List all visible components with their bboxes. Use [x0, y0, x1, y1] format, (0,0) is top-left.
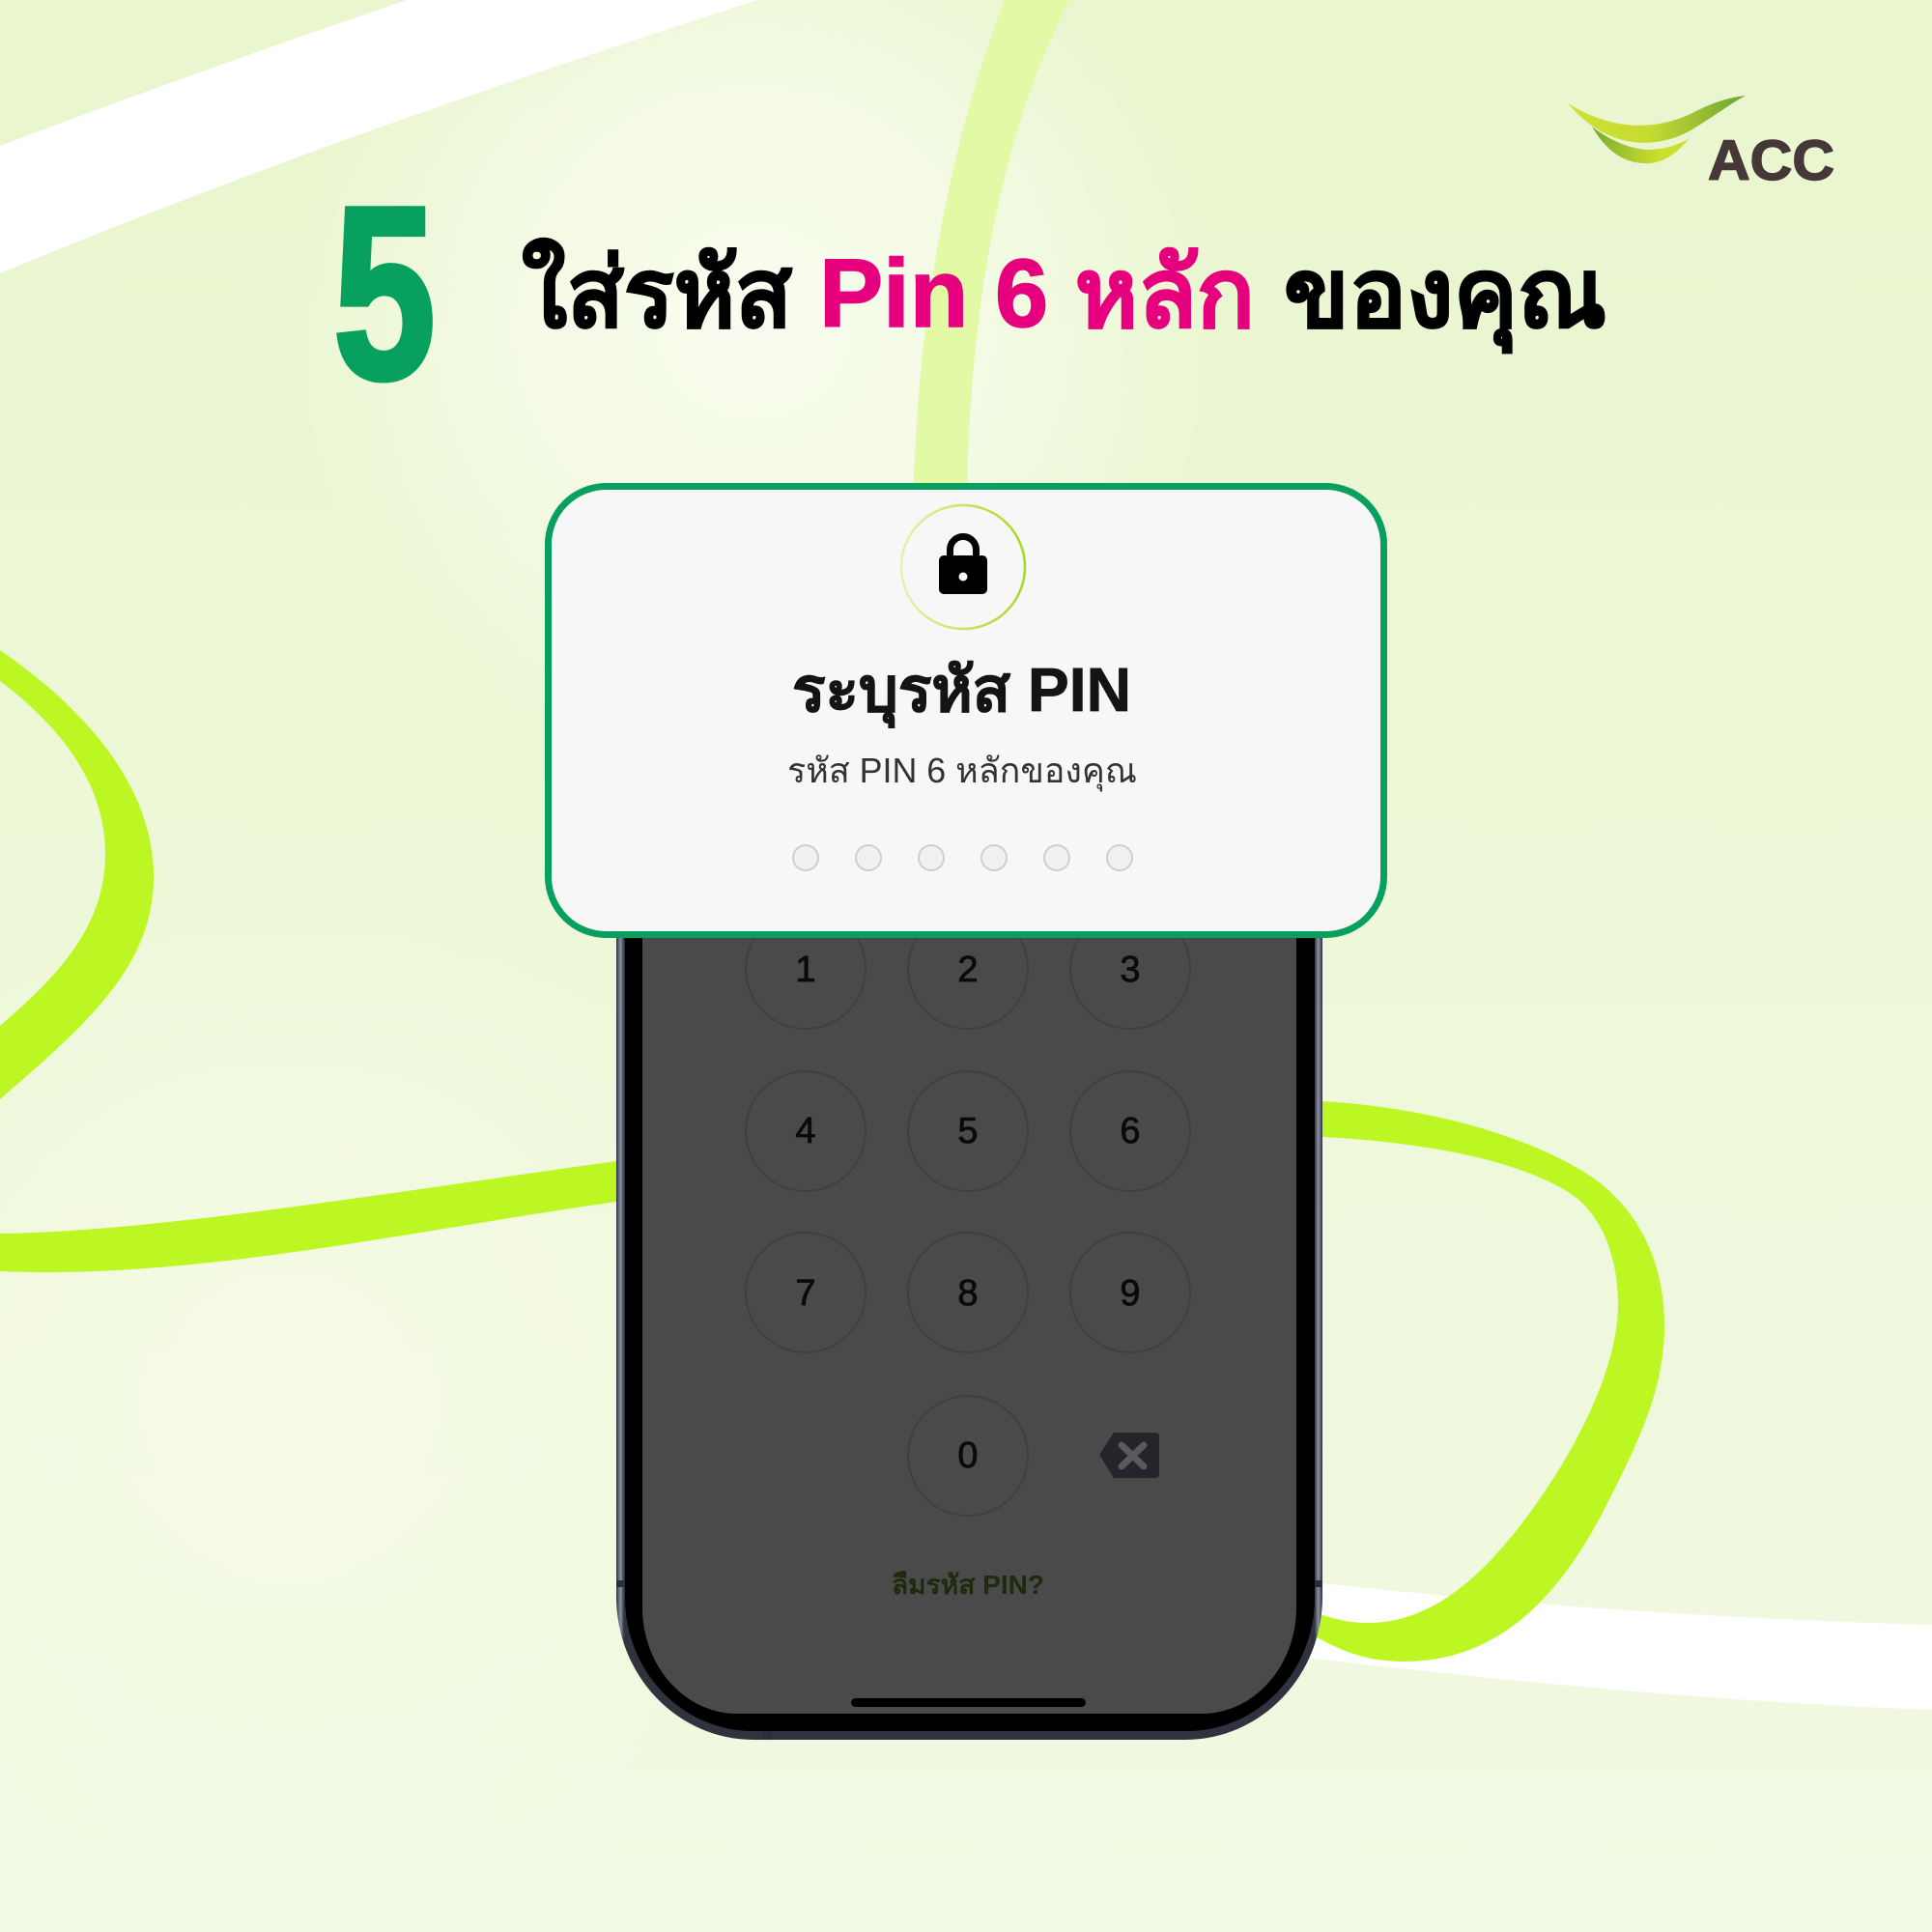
antenna bands	[616, 1580, 1322, 1740]
panel: pin card	[549, 487, 1383, 935]
keypad digits: 1	[795, 950, 816, 990]
ribbon: white bottom	[1256, 1577, 1932, 1710]
step number: 5	[333, 156, 436, 430]
pin dots	[793, 845, 1132, 870]
card subtitle: รหัส PIN 6 หลักของคุณ	[787, 751, 1137, 792]
ribbon: lime left band	[0, 1161, 616, 1272]
logo: ACC	[1568, 96, 1834, 192]
phone frame	[616, 676, 1322, 1740]
keypad digits: 2	[957, 950, 979, 990]
forgot pin link: ลืมรหัส PIN?	[892, 1570, 1044, 1600]
keypad digits: 9	[1120, 1273, 1141, 1314]
keypad digits: 0	[957, 1435, 979, 1476]
keypad digits: 3	[1120, 950, 1141, 990]
logo: ACC: ACC	[1708, 129, 1834, 192]
title: ของคุณ	[1284, 240, 1606, 354]
phone	[616, 676, 1322, 1740]
ribbon: lime right loop	[1285, 1101, 1664, 1662]
icon: lock	[901, 505, 1025, 629]
keypad digits: 4	[795, 1111, 816, 1151]
keypad	[746, 909, 1190, 1516]
icon: backspace	[1099, 1433, 1159, 1478]
title: ใส่รหัส	[522, 238, 792, 348]
card heading: ระบุรหัส PIN	[792, 655, 1131, 728]
title: Pin 6 หลัก	[819, 240, 1255, 348]
keypad digits	[795, 950, 1141, 1476]
phone screen	[642, 676, 1296, 1714]
keypad digits: 8	[957, 1273, 979, 1314]
keypad digits: 6	[1120, 1111, 1141, 1151]
ribbon: pale green arc	[914, 0, 1069, 484]
ribbon: lime left loop	[0, 650, 154, 1099]
ribbon: white top	[0, 0, 757, 273]
keypad digits: 5	[957, 1111, 979, 1151]
keypad digits: 7	[795, 1273, 816, 1314]
phone bezel	[625, 676, 1315, 1731]
title	[522, 238, 1606, 354]
home indicator	[851, 1698, 1086, 1707]
